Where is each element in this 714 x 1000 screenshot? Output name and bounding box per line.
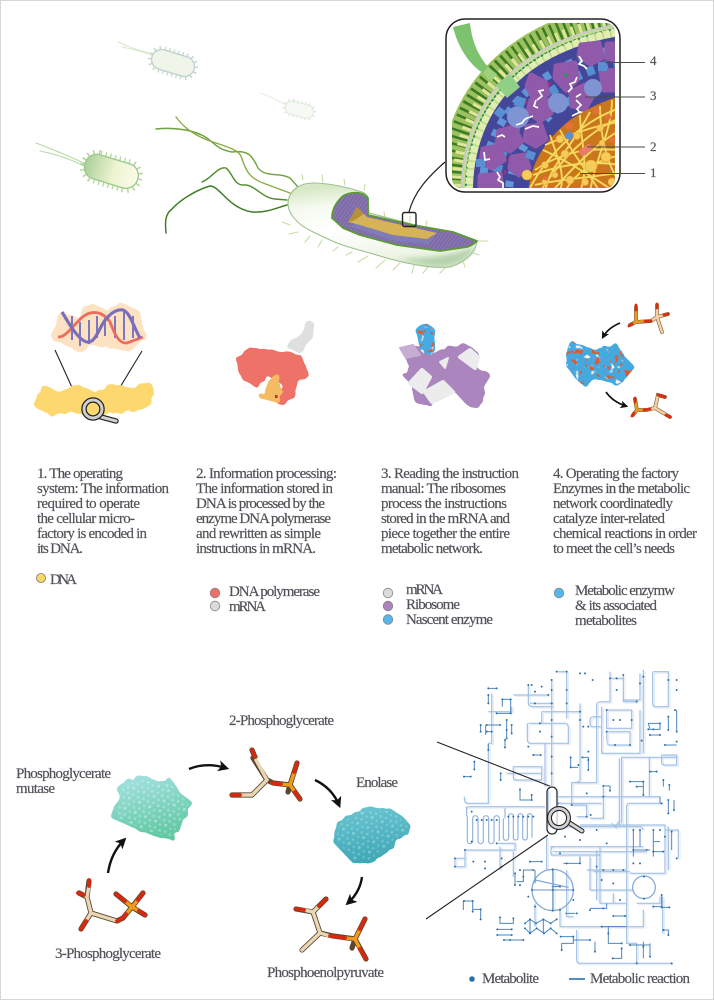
enzyme: phosphoglycerate mutase — [111, 776, 192, 840]
step 3 text: manual: The ribosomes — [381, 481, 506, 497]
DNA atom detail — [51, 302, 146, 352]
pathway label: Phosphoglycerate mutase — [16, 766, 111, 797]
zoom lines to network — [426, 742, 552, 919]
network legend — [469, 971, 690, 987]
blue enzymes — [507, 79, 602, 128]
step 2 text: and rewritten as simple — [196, 526, 321, 542]
molecule: 2-phosphoglycerate — [232, 750, 300, 799]
illustration: metabolic enzyme with substrates — [565, 304, 670, 417]
small bacterium, palest — [260, 93, 315, 120]
inset callout numbers: 3 — [650, 88, 656, 103]
inset callout numbers: 2 — [650, 139, 656, 154]
pathway cycles — [532, 869, 655, 911]
molecule: 3-phosphoglycerate — [78, 880, 145, 929]
step 4 text: Enzymes in the metabolic — [553, 481, 690, 497]
zoom connector and locator square — [402, 162, 445, 226]
flagellum base — [453, 23, 488, 73]
step 4 text: 4. Operating the factory — [553, 466, 680, 482]
step 1 text: its DNA. — [37, 541, 83, 557]
cytoplasm — [472, 36, 615, 188]
pathway label: 3-Phosphoglycerate: 3-Phosphoglycerate — [55, 946, 161, 962]
ribosomes — [480, 43, 616, 190]
arrows — [603, 323, 620, 337]
pathway label: Enolase: Enolase — [356, 775, 398, 791]
step 2 text: instructions in mRNA. — [196, 541, 316, 557]
illustration: ribosome with nascent enzyme — [400, 323, 489, 408]
legend: step 3: Nascent enzyme — [406, 612, 493, 628]
top molecule — [629, 304, 668, 332]
small bacterium, faded top — [118, 42, 197, 79]
step 3 text — [381, 466, 520, 557]
step 2 text: enzyme DNA polymerase — [196, 511, 331, 527]
legend: step 4 — [554, 583, 675, 629]
serpentine reaction loops — [467, 807, 532, 844]
flagella — [156, 117, 298, 233]
inset: cell interior detail — [446, 19, 620, 200]
cell wall layers — [462, 24, 620, 200]
network legend: Metabolite — [482, 971, 539, 987]
body shading — [400, 246, 476, 265]
step 4 text: catalyze inter-related — [553, 511, 666, 527]
step 3 text: 3. Reading the instruction — [381, 466, 520, 482]
step 4 text: network coordinatedly — [553, 496, 674, 512]
illustration: DNA double helix and magnifier — [33, 302, 155, 421]
DNA surface band — [33, 382, 155, 418]
legend: step 1 — [36, 572, 77, 588]
green protein mark — [564, 73, 568, 77]
step 1 text — [37, 466, 170, 557]
legend: step 4: metabolites — [575, 613, 637, 629]
step 4 text: to meet the cell’s needs — [553, 541, 675, 557]
step 2 text: 2. Information processing: — [196, 466, 337, 482]
step 3 text: metabolic network. — [381, 541, 483, 557]
molecule: phosphoenolpyruvate — [296, 899, 366, 959]
white mRNA squiggles — [484, 56, 587, 188]
main bacterium cut-away — [282, 175, 488, 273]
step 2 text: The information stored in — [196, 481, 334, 497]
illustration: DNA polymerase — [236, 320, 314, 405]
step 3 text: process the instructions — [381, 496, 507, 512]
legend: step 1: DNA — [50, 572, 77, 588]
bacterium, left green — [36, 143, 141, 191]
pathway label: Phosphoglycerate mutase: Phosphoglycerate — [16, 766, 111, 782]
legend: step 3: mRNA — [406, 582, 443, 598]
doubled parallel reaction lines — [457, 671, 680, 965]
legend: step 2 — [210, 584, 320, 615]
nucleoid — [528, 98, 615, 188]
reaction lines — [455, 670, 678, 963]
legend: step 3 — [383, 582, 493, 628]
legend: step 2: mRNA — [229, 599, 266, 615]
step 2 text: DNA is processed by the — [196, 496, 325, 512]
step 1 text: 1. The operating — [37, 466, 124, 482]
legend: step 2: DNA polymerase — [229, 584, 320, 600]
step 1 text: required to operate — [37, 496, 140, 512]
bottom molecule — [632, 395, 670, 417]
inset callout numbers: 4 — [650, 53, 657, 68]
inset callout numbers — [580, 53, 657, 180]
step 1 text: factory is encoded in — [37, 526, 148, 542]
metabolic network map — [455, 670, 680, 965]
legend: step 3: Ribosome — [406, 597, 460, 613]
hairs — [282, 175, 488, 273]
short darker links — [463, 688, 677, 958]
step 3 text: stored in the mRNA and — [381, 511, 510, 527]
pathway label: Phosphoenolpyruvate: Phosphoenolpyruvate — [267, 965, 384, 981]
step 4 text — [553, 466, 697, 557]
enzyme: enolase — [333, 806, 410, 864]
pathway arrows — [108, 765, 362, 903]
metabolite dots — [455, 672, 677, 963]
pathway label: 2-Phosphoglycerate: 2-Phosphoglycerate — [229, 713, 334, 729]
magnifier — [84, 400, 116, 421]
step 2 text — [196, 466, 337, 557]
network legend: Metabolic reaction — [590, 971, 690, 987]
legend: step 4: Metabolic enzymw — [575, 583, 675, 599]
step 1 text: system: The information — [37, 481, 170, 497]
highlighted reaction and magnifier — [547, 787, 582, 834]
inset callout numbers: 1 — [650, 165, 656, 180]
step 4 text: chemical reactions in order — [553, 526, 697, 542]
legend: step 4: & its associated — [575, 598, 658, 614]
pathway label: Phosphoglycerate mutase: mutase — [16, 781, 55, 797]
step 1 text: the cellular micro- — [37, 511, 135, 527]
step 3 text: piece together the entire — [381, 526, 510, 542]
